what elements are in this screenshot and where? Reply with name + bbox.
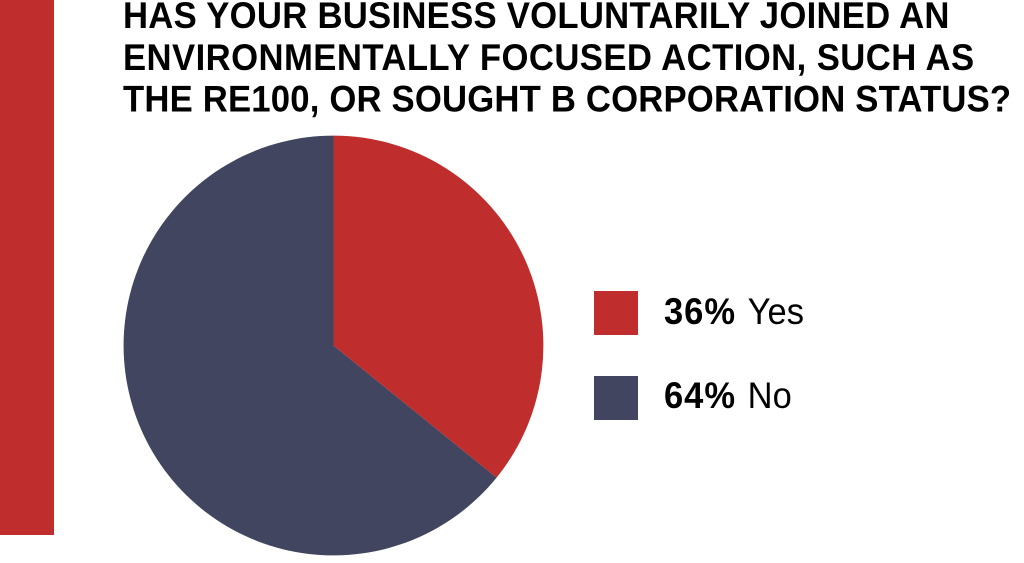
slice: 64% No [124, 136, 497, 555]
legend label: 64% No: 64% No [664, 376, 792, 417]
title [123, 0, 1011, 120]
decorative red side bar [0, 0, 54, 535]
title: THE RE100, OR SOUGHT B CORPORATION STATUS? [123, 80, 1011, 120]
legend label: 36% Yes: 36% Yes [664, 292, 804, 333]
slice: 36% Yes [334, 136, 543, 478]
legend [594, 291, 804, 420]
legend swatch: Yes [594, 291, 638, 335]
title: ENVIRONMENTALLY FOCUSED ACTION, SUCH AS [123, 38, 975, 78]
legend swatch: No [594, 376, 638, 420]
